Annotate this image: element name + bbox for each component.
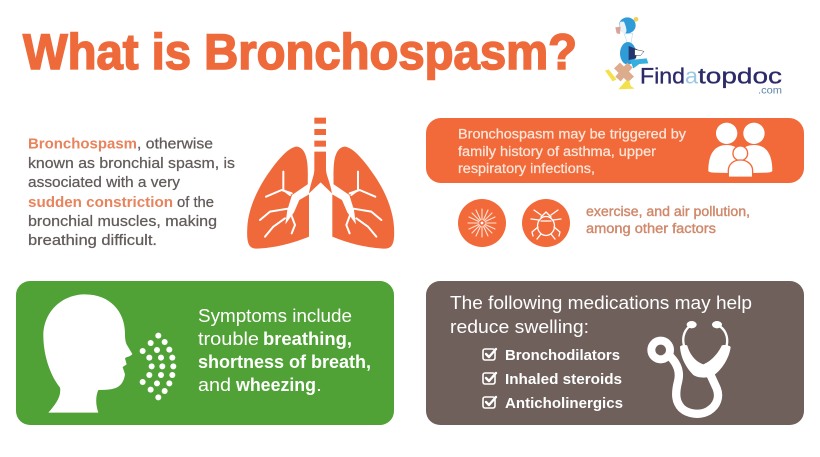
text block: triggers [458,126,686,176]
text block: symptoms: and [198,375,231,395]
lung airways [260,172,381,237]
icon: lungs [247,118,394,249]
text block: medications intro [450,292,752,337]
panel: medications [426,281,804,425]
logo wordmark: .com [758,84,782,96]
icon: checkboxes [483,349,496,408]
text block: symptoms: trouble [198,329,259,349]
text block: definition: bronchial muscles, making [28,214,217,230]
icon: duck mascot [605,17,648,89]
logo wordmark: a [685,64,699,88]
icon: breath dots [140,333,176,400]
text block: medications intro: The following medications may help [450,292,752,313]
text block: symptoms [198,306,371,395]
list: medications [505,347,623,412]
logo wordmark: topdoc [698,64,782,88]
text block: symptoms: . [316,375,322,395]
text block: triggers: family history of asthma, upper [458,144,657,159]
text block: other factors [586,204,750,236]
title: What is Bronchospasm? [23,24,577,80]
text block: symptoms: wheezing [235,375,316,395]
icon: pollen circle [458,199,506,247]
logo wordmark [640,64,782,96]
text block: definition: sudden constriction [28,195,173,211]
icon: head profile [43,294,132,413]
text block: triggers: Bronchospasm may be triggered by [458,126,686,142]
logo wordmark: Find [640,64,685,88]
text block: definition: known as bronchial spasm, is [28,156,235,172]
list: medications: Bronchodilators [505,347,620,364]
panel: triggers [426,118,804,183]
text block: definition: breathing difficult. [28,233,157,249]
list: medications: Inhaled steroids [505,371,622,388]
icon: stethoscope [651,321,731,414]
text block: medications intro: reduce swelling: [450,316,589,337]
text block: symptoms: shortness of breath, [198,352,371,372]
panel: symptoms [16,281,394,425]
text block: triggers: respiratory infections, [458,161,595,176]
text block: other factors: among other factors [586,221,716,236]
text block: definition [28,136,235,249]
text block: definition: associated with a very [28,175,181,191]
logo: Findatopdoc [605,17,782,97]
text block: definition: , otherwise [137,136,213,152]
text block: symptoms: Symptoms include [198,306,352,326]
icon: family [708,123,772,177]
text block: other factors: exercise, and air pollution, [586,204,750,219]
text block: definition: Bronchospasm [28,136,137,152]
text block: symptoms: breathing, [263,329,352,349]
icon: dust mite circle [522,199,570,247]
text block: definition: of the [177,195,214,211]
list: medications: Anticholinergics [505,395,623,412]
